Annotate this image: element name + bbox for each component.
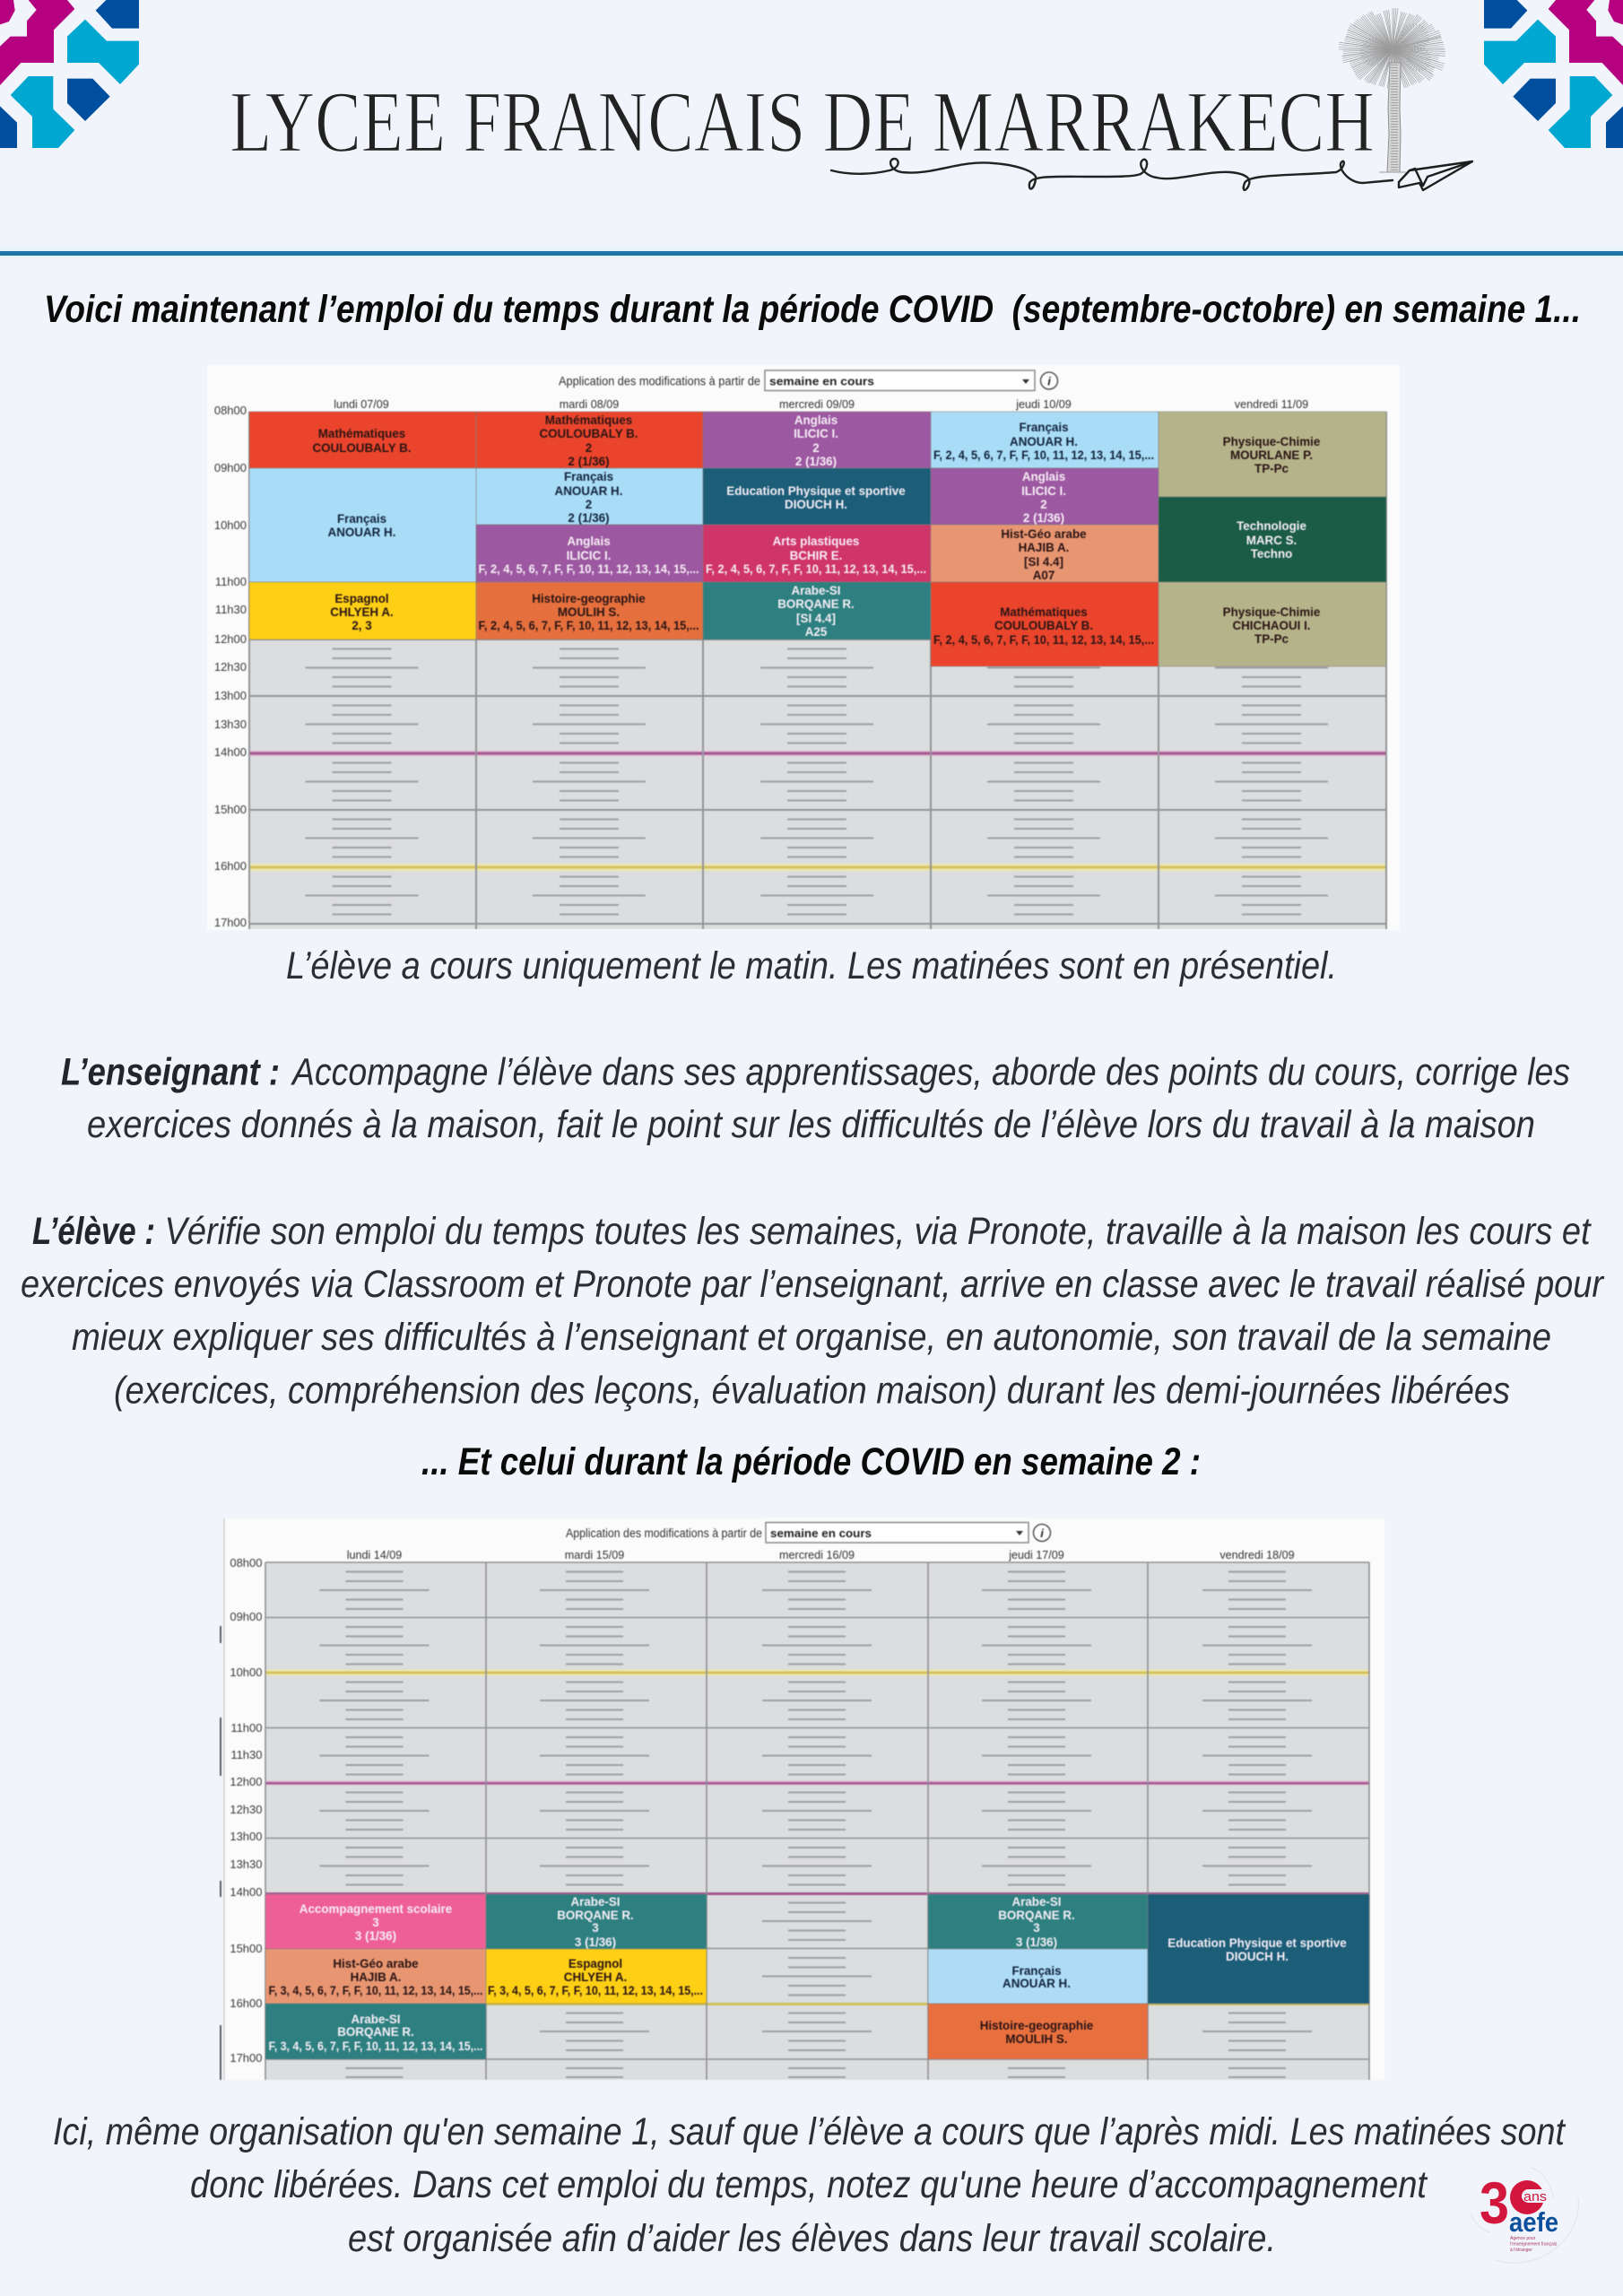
- vendredi: Technologie: [1159, 497, 1386, 582]
- text: cours le matin: L’élève a cours uniquement le matin. Les matinées sont en présentiel.: [286, 944, 1337, 987]
- jeudi: Anglais: Anglais: [1022, 470, 1065, 483]
- time axis: 11h00: [215, 575, 247, 588]
- empty timetable grid: [249, 412, 1386, 929]
- mardi: Espagnol: CHLYEH A.: [564, 1970, 627, 1984]
- mardi: Histoire-géographie: Histoire-geographie: [532, 592, 646, 605]
- mardi: Espagnol: [486, 1949, 707, 2004]
- time axis: 11h00: [230, 1721, 262, 1735]
- lundi: Espagnol: Espagnol: [334, 592, 389, 605]
- text block: l'élève: [21, 1210, 1604, 1412]
- vendredi: Physique-Chimie (2): TP-Pc: [1254, 632, 1289, 646]
- icon: paper plane: [1399, 161, 1472, 190]
- mercredi: Anglais: [703, 412, 931, 468]
- mercredi: Education physique: Education Physique et sportive: [726, 484, 906, 498]
- jeudi: Mathématiques: [931, 582, 1159, 666]
- lundi: Arabe-SI: Arabe-SI: [351, 2013, 401, 2026]
- day headers: lundi 14/09: [347, 1549, 402, 1561]
- time axis: 08h00: [214, 404, 247, 417]
- logo: aefe 30 ans: 3: [1480, 2170, 1509, 2236]
- jeudi: Hist-Géo arabe: A07: [1033, 569, 1055, 582]
- jeudi: Mathématiques: F, 2, 4, 5, 6, 7, F, F, 10, 11, 12, 13, 14, 15,...: [933, 633, 1154, 647]
- jeudi: Hist-Géo arabe: [931, 525, 1159, 582]
- time axis: 13h30: [230, 1857, 262, 1871]
- vendredi: Physique-Chimie: MOURLANE P.: [1230, 448, 1313, 462]
- panel: emploi du temps semaine 2: [221, 1518, 1384, 2080]
- mercredi: Arts plastiques: BCHIR E.: [790, 549, 842, 562]
- day headers: mercredi 16/09: [779, 1549, 855, 1561]
- selector bar: [559, 370, 1058, 391]
- jeudi: Français: [928, 1949, 1148, 2004]
- panel background: [207, 365, 1400, 930]
- mardi: Arabe-SI: 3 (1/36): [575, 1935, 616, 1949]
- time axis: 12h30: [230, 1803, 262, 1816]
- mardi: Mathématiques: Mathématiques: [545, 413, 632, 427]
- selector bar: i: [1047, 375, 1051, 387]
- lundi: Mathématiques: [249, 412, 476, 468]
- mardi: Espagnol: Espagnol: [568, 1957, 622, 1970]
- time axis: 10h00: [214, 518, 247, 532]
- lundi: Hist-Géo arabe: F, 3, 4, 5, 6, 7, F, F, 10, 11, 12, 13, 14, 15,...: [269, 1984, 482, 1997]
- lundi: Arabe-SI: BORQANE R.: [337, 2025, 414, 2039]
- time axis: 17h00: [214, 916, 247, 929]
- lundi: Français: [249, 468, 476, 582]
- time axis: 14h00: [214, 745, 247, 759]
- lundi: Accompagnement scolaire: 3 (1/36): [355, 1929, 396, 1943]
- jeudi: Hist-Géo arabe: HAJIB A.: [1019, 541, 1069, 554]
- time axis: 12h00: [214, 632, 247, 646]
- heading: semaine 2: ... Et celui durant la période COVID en semaine 2 :: [421, 1440, 1201, 1483]
- logo: aefe 30 ans: ans: [1523, 2189, 1547, 2205]
- mardi: Français: 2 (1/36): [568, 511, 610, 525]
- mercredi: Education physique: [703, 468, 931, 525]
- time axis: [214, 404, 247, 929]
- jeudi: Anglais: 2 (1/36): [1023, 511, 1064, 525]
- text block: l'élève: L’élève :: [32, 1210, 155, 1253]
- mardi: Mathématiques: COULOUBALY B.: [539, 427, 638, 440]
- mardi: Anglais: [476, 525, 703, 582]
- mercredi: Anglais: 2: [812, 441, 820, 455]
- mardi: Anglais: Anglais: [567, 535, 611, 548]
- time axis: 11h30: [215, 603, 247, 616]
- vendredi: Education physique: DIOUCH H.: [1226, 1950, 1289, 1963]
- corner ornament: top right: [1484, 0, 1623, 148]
- jeudi: Français: Français: [1011, 1964, 1062, 1978]
- day headers: mardi 15/09: [565, 1549, 624, 1561]
- vendredi: Physique-Chimie: Physique-Chimie: [1223, 435, 1320, 448]
- mardi: Français: [476, 468, 703, 525]
- logo: aefe 30 ans: aefe: [1509, 2206, 1558, 2238]
- mercredi: Anglais: Anglais: [794, 413, 838, 427]
- text block: semaine 2: donc libérées. Dans cet emploi du temps, notez qu'une heure d’accompagnement: [190, 2163, 1428, 2206]
- jeudi: Arabe-SI: 3 (1/36): [1016, 1935, 1057, 1949]
- mercredi: Arts plastiques: Arts plastiques: [773, 535, 859, 548]
- jeudi: Français: Français: [1019, 421, 1069, 434]
- day headers: jeudi 17/09: [1008, 1549, 1064, 1561]
- selector bar: Application des modifications à partir de: [559, 375, 760, 387]
- lundi: Mathématiques: Mathématiques: [318, 427, 405, 440]
- vendredi: Physique-Chimie: TP-Pc: [1254, 462, 1289, 475]
- mercredi: Anglais: 2 (1/36): [795, 455, 837, 468]
- jeudi: Arabe-SI: [928, 1894, 1148, 1949]
- text block: l'enseignant: L’enseignant :: [61, 1051, 280, 1094]
- mardi: Arabe-SI: [486, 1894, 707, 1949]
- mercredi: Arts plastiques: F, 2, 4, 5, 6, 7, F, F, 10, 11, 12, 13, 14, 15,...: [706, 562, 926, 576]
- mardi: Anglais: ILICIC I.: [567, 549, 611, 562]
- vendredi: Physique-Chimie (2): Physique-Chimie: [1223, 605, 1320, 619]
- mardi: Mathématiques: [476, 412, 703, 468]
- jeudi: Mathématiques: Mathématiques: [1000, 605, 1088, 619]
- vendredi: Technologie: MARC S.: [1246, 534, 1297, 547]
- decorative squiggle: [831, 159, 1393, 190]
- jeudi: Hist-Géo arabe: [SI 4.4]: [1024, 555, 1063, 569]
- vendredi: Technologie: Technologie: [1237, 519, 1306, 533]
- time axis: 17h00: [230, 2051, 262, 2065]
- jeudi: Histoire-géographie: MOULIH S.: [1005, 2032, 1068, 2046]
- day headers: lundi 07/09: [334, 398, 389, 411]
- mardi: Arabe-SI: Arabe-SI: [570, 1895, 621, 1909]
- vendredi: Technologie: Techno: [1251, 547, 1292, 561]
- mardi: Histoire-géographie: MOULIH S.: [558, 605, 620, 619]
- jeudi: Français: ANOUAR H.: [1010, 435, 1078, 448]
- logo: aefe 30 ans: [1471, 2168, 1578, 2263]
- time axis: 12h00: [230, 1775, 262, 1788]
- jeudi: Arabe-SI: BORQANE R.: [998, 1909, 1075, 1922]
- lundi: Espagnol: CHLYEH A.: [330, 605, 394, 619]
- lundi: Espagnol: [249, 582, 476, 639]
- mercredi: Education physique: DIOUCH H.: [785, 498, 847, 511]
- jeudi: Arabe-SI: Arabe-SI: [1011, 1895, 1062, 1909]
- panel: emploi du temps semaine 1: [207, 365, 1400, 930]
- time axis: 16h00: [214, 859, 247, 873]
- mardi: Espagnol: F, 3, 4, 5, 6, 7, F, F, 10, 11, 12, 13, 14, 15,...: [488, 1984, 703, 1997]
- mercredi: Arabe-SI: Arabe-SI: [791, 584, 841, 597]
- lundi: Français: Français: [337, 512, 386, 526]
- left edge marks: [221, 1518, 224, 2080]
- lundi: Arabe-SI: [265, 2004, 486, 2059]
- mercredi: Arabe-SI: A25: [805, 625, 828, 639]
- empty timetable grid: [265, 1562, 1369, 2080]
- time axis: 16h00: [230, 1996, 262, 2010]
- lundi: Hist-Géo arabe: [265, 1949, 486, 2004]
- mardi: Mathématiques: 2: [586, 441, 592, 455]
- mercredi: Arts plastiques: [703, 525, 931, 582]
- selector bar: i: [1040, 1526, 1044, 1540]
- panel background: [224, 1518, 1384, 2080]
- selector bar: semaine en cours: [770, 1526, 872, 1540]
- text block: semaine 2: est organisée afin d’aider les élèves dans leur travail scolaire.: [348, 2217, 1276, 2260]
- text block: semaine 2: [53, 2110, 1567, 2260]
- time axis: 14h00: [230, 1885, 262, 1899]
- mercredi: Anglais: ILICIC I.: [794, 427, 838, 440]
- text block: l'enseignant: [61, 1051, 1570, 1146]
- day headers: vendredi 11/09: [1235, 398, 1308, 411]
- jeudi: Arabe-SI: 3: [1033, 1921, 1040, 1935]
- time axis: 13h30: [214, 718, 247, 731]
- icon: palm tree: [1334, 2, 1450, 172]
- day headers: [334, 398, 1308, 411]
- corner ornament: top left: [0, 0, 139, 148]
- logo: aefe 30 ans: Agence pour: [1510, 2236, 1536, 2241]
- vendredi: Education physique: [1148, 1894, 1369, 2004]
- mercredi: Arabe-SI: [SI 4.4]: [796, 612, 836, 625]
- mardi: Arabe-SI: 3: [592, 1921, 599, 1935]
- header rule: [0, 248, 1623, 258]
- jeudi: Français: F, 2, 4, 5, 6, 7, F, F, 10, 11, 12, 13, 14, 15,...: [933, 448, 1154, 462]
- day headers: jeudi 10/09: [1015, 398, 1072, 411]
- time axis: 09h00: [214, 461, 247, 474]
- lundi: Français: ANOUAR H.: [328, 526, 395, 539]
- logo: aefe 30 ans: à l'étranger: [1510, 2248, 1532, 2253]
- time axis: 13h00: [214, 689, 247, 702]
- mardi: Histoire-géographie: [476, 582, 703, 639]
- time axis: 11h30: [230, 1748, 262, 1761]
- time axis: 13h00: [230, 1830, 262, 1843]
- mardi: Mathématiques: 2 (1/36): [568, 455, 610, 468]
- lundi: Arabe-SI: F, 3, 4, 5, 6, 7, F, F, 10, 11, 12, 13, 14, 15,...: [269, 2039, 482, 2053]
- jeudi: Histoire-géographie: [928, 2004, 1148, 2059]
- day headers: vendredi 18/09: [1219, 1549, 1295, 1561]
- selector bar: semaine en cours: [769, 375, 874, 387]
- jeudi: Anglais: 2: [1040, 498, 1047, 511]
- time axis: 12h30: [214, 660, 247, 674]
- jeudi: Français: [931, 412, 1159, 468]
- jeudi: Hist-Géo arabe: Hist-Géo arabe: [1001, 527, 1087, 541]
- mardi: Français: Français: [564, 470, 613, 483]
- jeudi: Anglais: ILICIC I.: [1021, 484, 1066, 498]
- time axis: 15h00: [230, 1942, 262, 1955]
- mardi: Arabe-SI: BORQANE R.: [557, 1909, 634, 1922]
- selector bar: [566, 1523, 1051, 1543]
- day headers: mercredi 09/09: [779, 398, 855, 411]
- lundi: Hist-Géo arabe: HAJIB A.: [351, 1970, 401, 1984]
- mardi: Français: ANOUAR H.: [555, 484, 622, 498]
- vendredi: Physique-Chimie (2): CHICHAOUI I.: [1232, 619, 1311, 632]
- time axis: 08h00: [230, 1556, 262, 1570]
- lundi: Accompagnement scolaire: 3: [372, 1916, 379, 1929]
- mercredi: Arabe-SI: BORQANE R.: [777, 597, 855, 611]
- time axis: [230, 1556, 262, 2065]
- day headers: [347, 1549, 1295, 1561]
- lundi: Espagnol: 2, 3: [352, 619, 372, 632]
- lundi: Accompagnement scolaire: Accompagnement scolaire: [299, 1902, 452, 1916]
- selector bar: Application des modifications à partir de: [566, 1526, 762, 1540]
- jeudi: Mathématiques: COULOUBALY B.: [994, 619, 1093, 632]
- vendredi: Physique-Chimie (2): [1159, 582, 1386, 666]
- jeudi: Histoire-géographie: Histoire-geographie: [980, 2019, 1093, 2032]
- lundi: Hist-Géo arabe: Hist-Géo arabe: [333, 1957, 419, 1970]
- day headers: mardi 08/09: [560, 398, 619, 411]
- lundi: Accompagnement scolaire: [265, 1894, 486, 1949]
- jeudi: Français: ANOUAR H.: [1002, 1977, 1071, 1990]
- vendredi: Physique-Chimie: [1159, 412, 1386, 497]
- mardi: Français: 2: [586, 498, 592, 511]
- mardi: Anglais: F, 2, 4, 5, 6, 7, F, F, 10, 11, 12, 13, 14, 15,...: [479, 562, 699, 576]
- mardi: Histoire-géographie: F, 2, 4, 5, 6, 7, F, F, 10, 11, 12, 13, 14, 15,...: [479, 619, 699, 632]
- time axis: 09h00: [230, 1610, 262, 1623]
- logo: aefe 30 ans: l'enseignement français: [1510, 2242, 1558, 2248]
- time axis: 15h00: [214, 803, 247, 816]
- vendredi: Education physique: Education Physique et sportive: [1167, 1936, 1347, 1950]
- jeudi: Anglais: [931, 468, 1159, 525]
- lundi: Mathématiques: COULOUBALY B.: [312, 441, 412, 455]
- time axis: 10h00: [230, 1665, 262, 1679]
- mercredi: Arabe-SI: [703, 582, 931, 639]
